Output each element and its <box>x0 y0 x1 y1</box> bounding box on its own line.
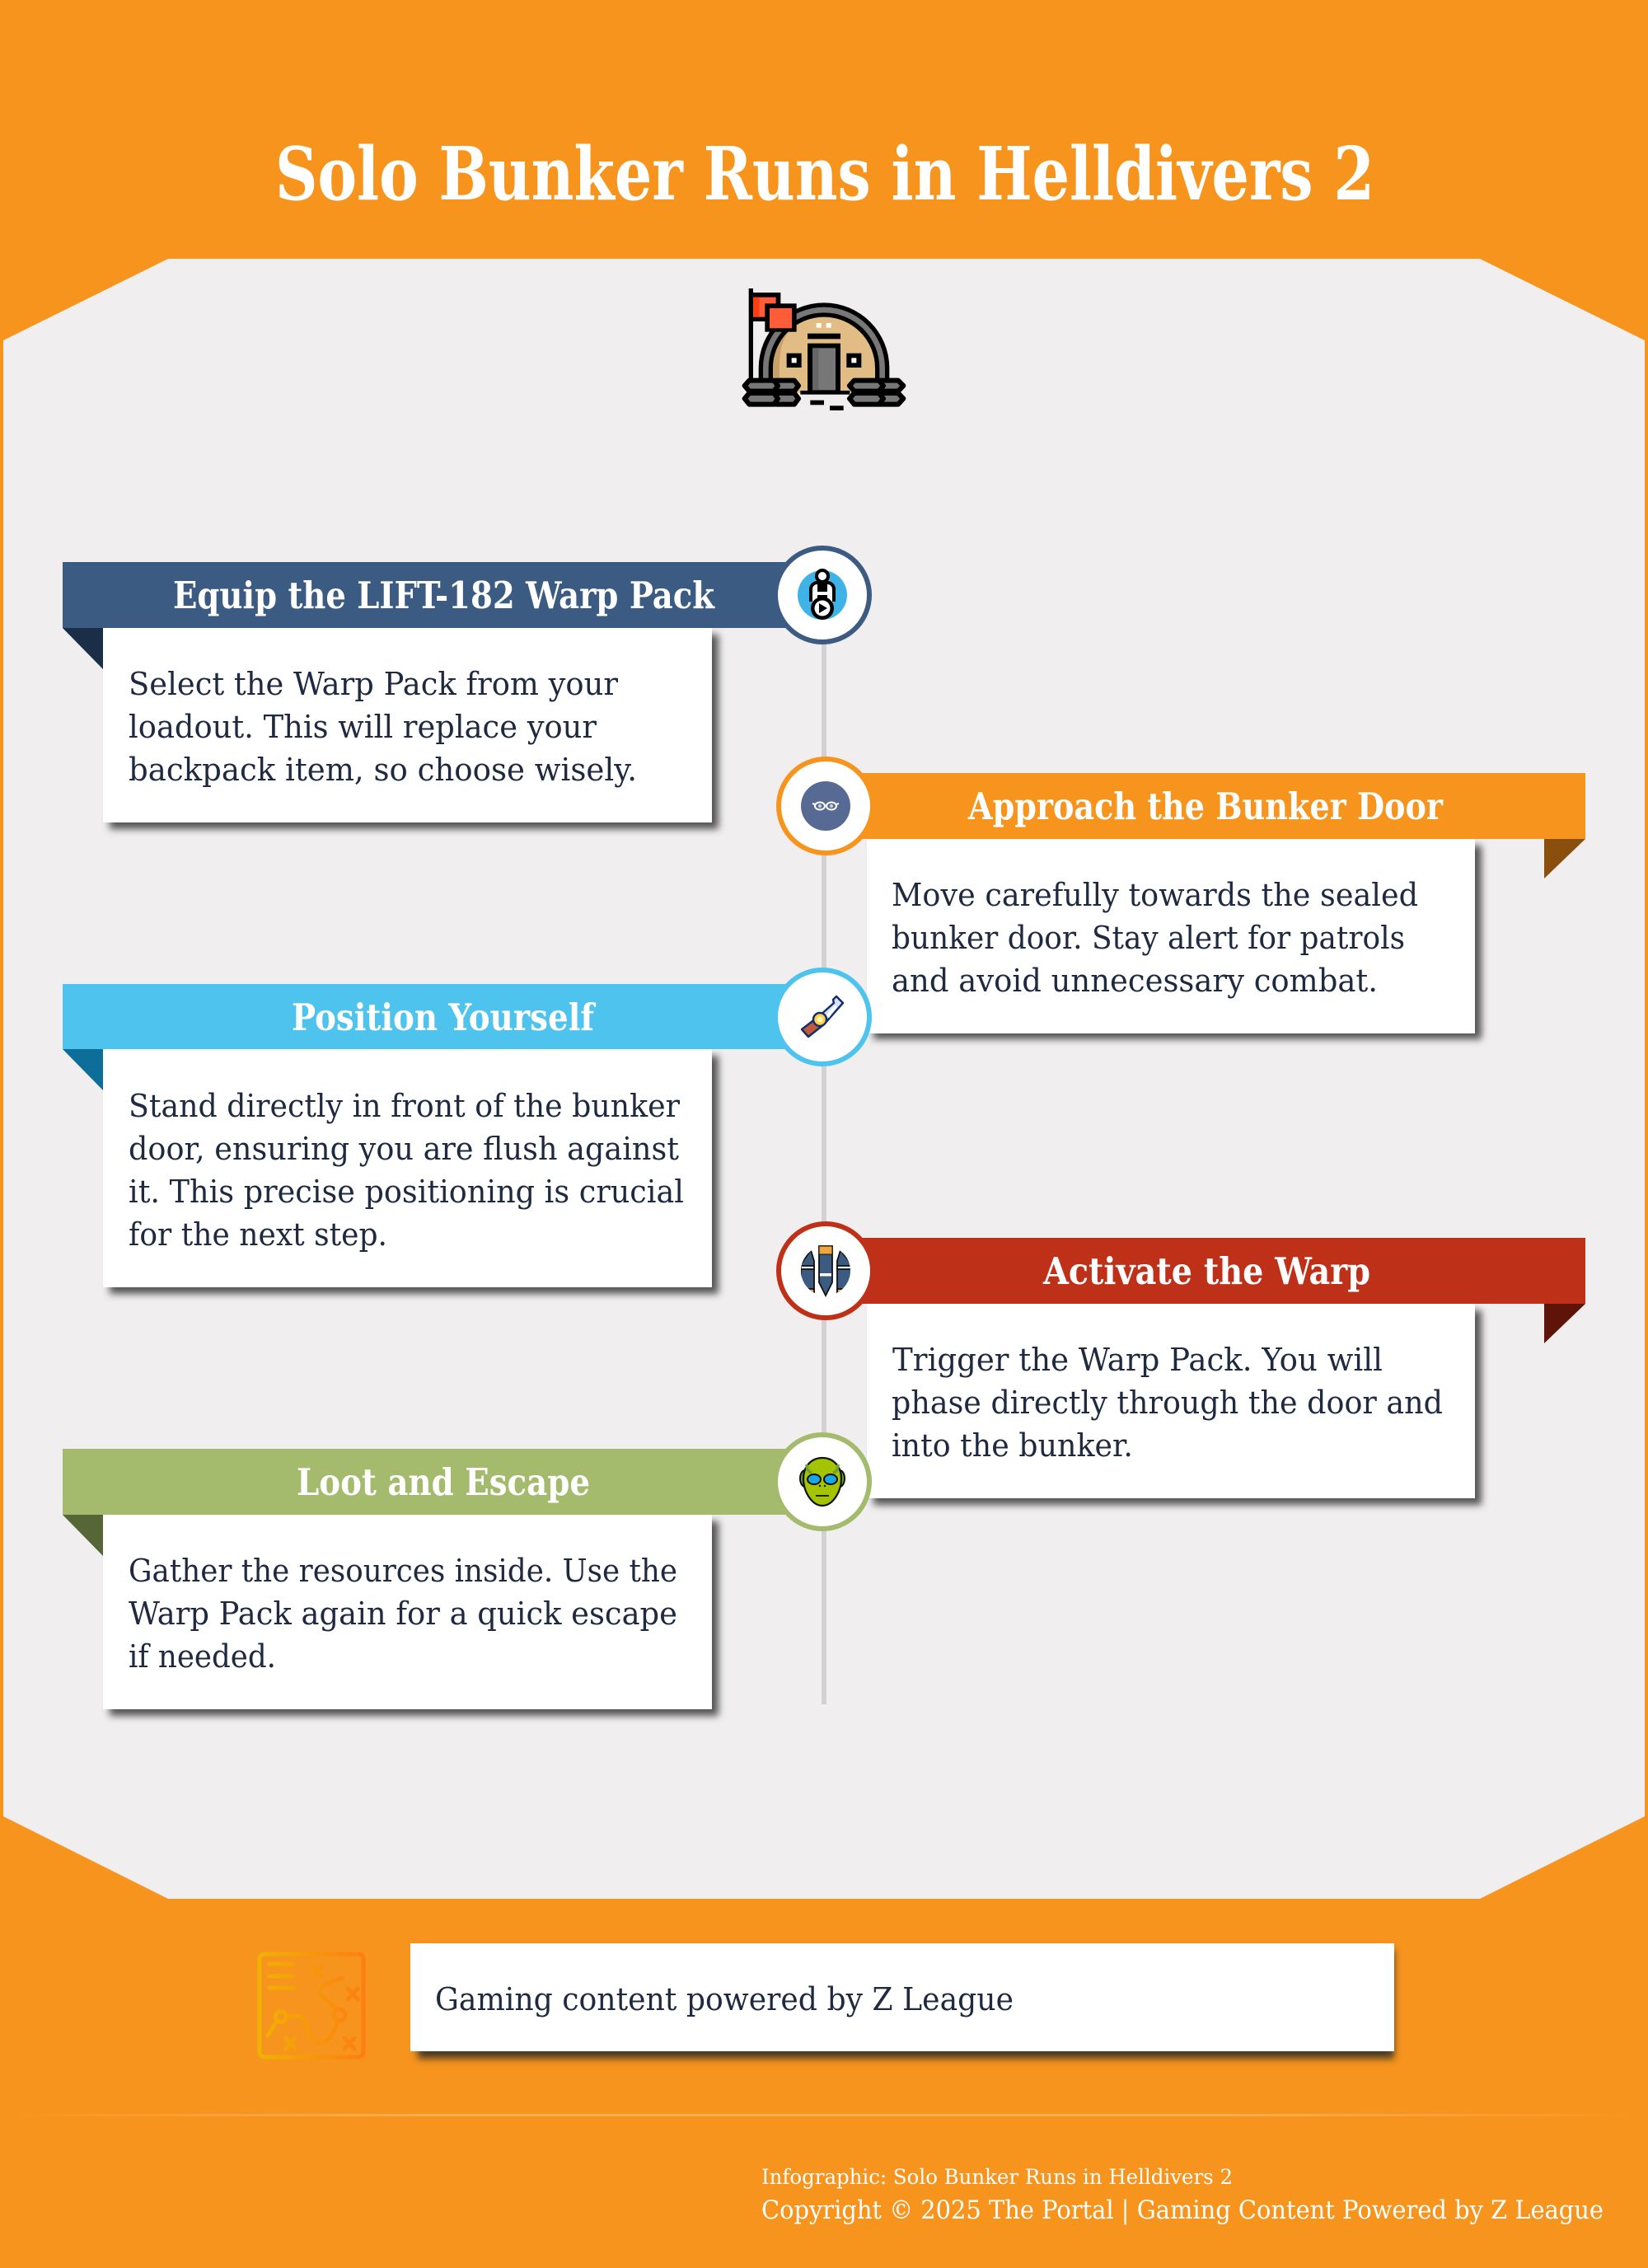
text: step 4: phase directly through the door and <box>892 1385 1443 1421</box>
title: Solo Bunker Runs in Helldivers 2 <box>275 130 1374 217</box>
text: step 2: and avoid unnecessary combat. <box>892 963 1378 999</box>
step 1: equip <box>63 562 804 829</box>
icon: blade <box>775 970 869 1064</box>
text: step 1: backpack item, so choose wisely. <box>129 752 637 788</box>
step 4: activate <box>857 1238 1585 1505</box>
icon: glasses <box>779 759 873 853</box>
text: step 5: Warp Pack again for a quick escape <box>129 1596 677 1632</box>
heading: step 1: Equip the LIFT-182 Warp Pack <box>173 574 715 617</box>
text: step 5: if needed. <box>129 1638 276 1675</box>
text: step 3 <box>129 1088 684 1253</box>
heading: step 4: Activate the Warp <box>1042 1249 1370 1293</box>
footer divider <box>8 2114 1640 2116</box>
text: step 4: Trigger the Warp Pack. You will <box>892 1342 1383 1378</box>
panel: main content background <box>3 259 1645 1899</box>
text: step 2: Move carefully towards the sealed <box>892 877 1418 913</box>
step 5: loot <box>63 1449 804 1716</box>
footer text: Copyright © 2025 The Portal | Gaming Content Powered by Z League <box>761 2195 1604 2225</box>
timeline line <box>822 626 826 1704</box>
icon: strategy map <box>260 1954 363 2057</box>
callout: powered by: Gaming content powered by Z League <box>435 1981 1014 2017</box>
text: step 3: door, ensuring you are flush against <box>129 1131 679 1167</box>
text: step 5: Gather the resources inside. Use the <box>129 1553 677 1589</box>
text: step 5 <box>129 1553 677 1675</box>
text: step 4: into the bunker. <box>892 1427 1133 1464</box>
text: step 1: loadout. This will replace your <box>129 709 597 745</box>
icon: alien head <box>775 1435 869 1529</box>
heading: step 2: Approach the Bunker Door <box>967 785 1444 828</box>
text: step 4 <box>892 1342 1443 1464</box>
text: step 1 <box>129 666 637 788</box>
heading: step 3: Position Yourself <box>292 996 596 1039</box>
step 3: position <box>63 984 804 1294</box>
footer text <box>761 2165 1604 2225</box>
callout: powered by <box>410 1943 1394 2059</box>
text: step 3: Stand directly in front of the bunker <box>129 1088 681 1124</box>
text: step 3: for the next step. <box>129 1216 387 1253</box>
text: step 2 <box>892 877 1418 999</box>
icon: warp pack person <box>775 548 869 642</box>
text: step 1: Select the Warp Pack from your <box>129 666 619 702</box>
icon: bunker with flag <box>745 288 903 410</box>
text: step 3: it. This precise positioning is crucial <box>129 1174 684 1210</box>
footer text: Infographic: Solo Bunker Runs in Helldivers 2 <box>761 2165 1233 2189</box>
step 2: approach <box>857 773 1585 1039</box>
heading: step 5: Loot and Escape <box>297 1460 590 1504</box>
icon: bullets <box>779 1224 873 1318</box>
text: step 2: bunker door. Stay alert for patrols <box>892 920 1405 956</box>
